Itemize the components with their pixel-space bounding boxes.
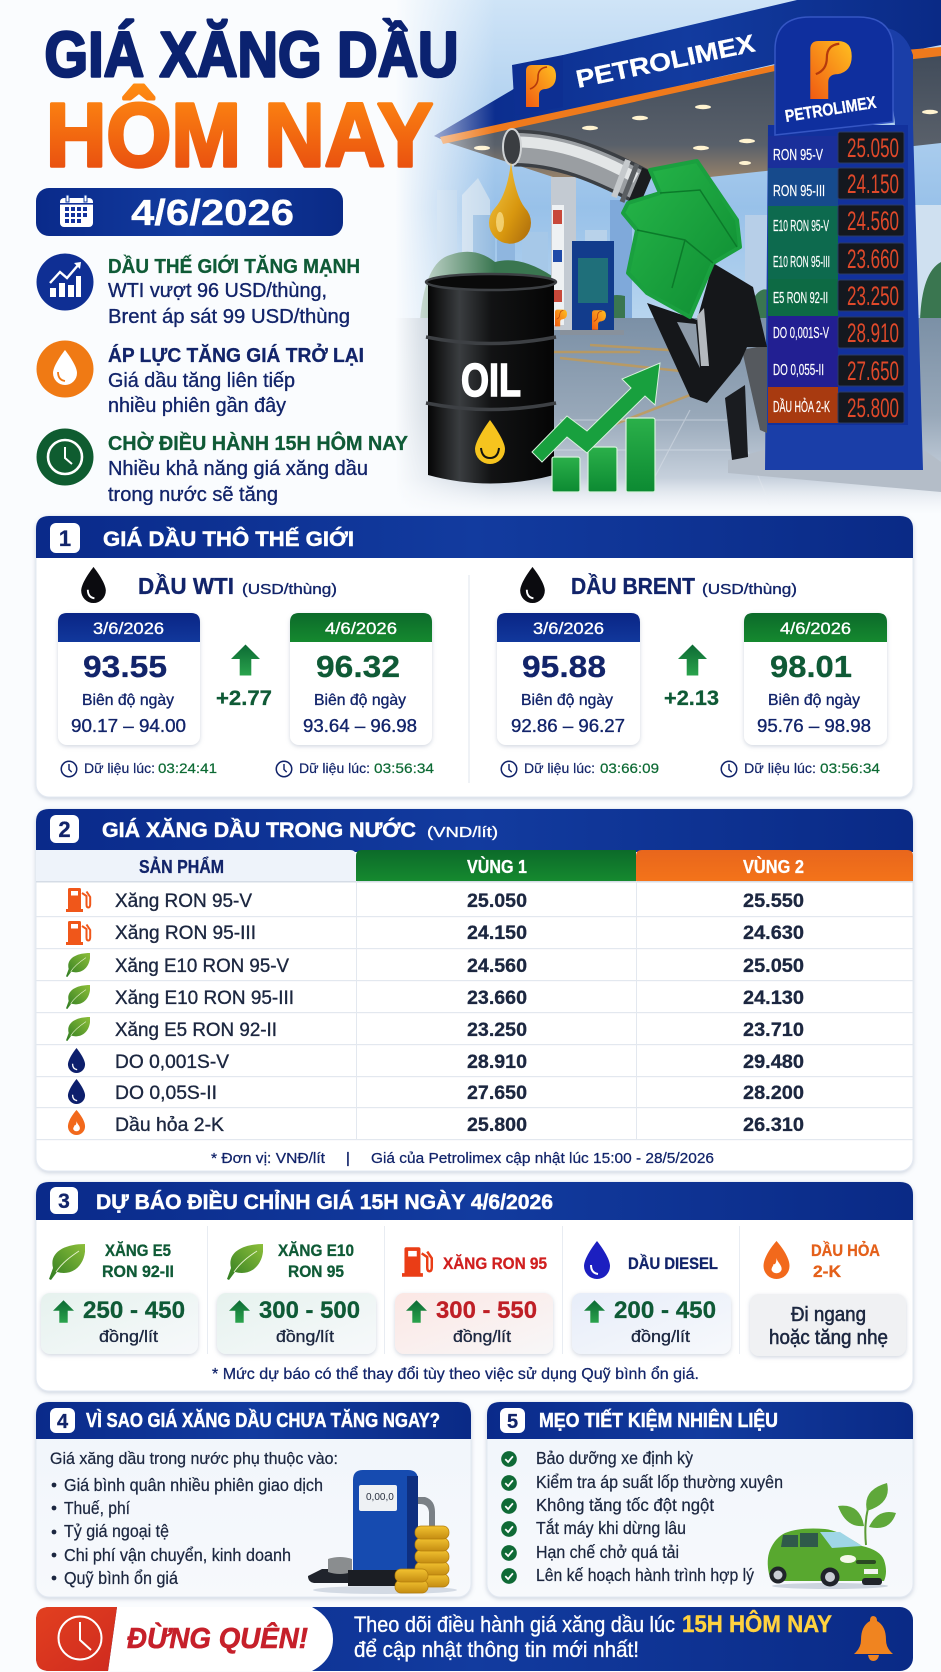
tips list: Tắt máy khi dừng lâu	[536, 1517, 686, 1538]
forecast: kerosene	[750, 1241, 906, 1356]
fuel rows: 23.250	[847, 281, 899, 311]
data timestamps: Dữ liệu lúc:	[299, 760, 370, 776]
barrel drop icon	[475, 420, 505, 464]
icon: orange drop	[36, 340, 94, 398]
rising green chart	[532, 363, 660, 492]
highlight: upward pressure: ÁP LỰC TĂNG GIÁ TRỞ LẠI	[108, 343, 364, 367]
fuel rows: DO 0,001S-V	[773, 325, 829, 342]
region 1 values: 25.050	[467, 891, 527, 912]
highlight: world oil up: Brent áp sát 99 USD/thùng	[108, 306, 350, 328]
region 1 values: 28.910	[467, 1052, 527, 1073]
forecast: E10: XĂNG E10	[278, 1241, 354, 1260]
forecast: diesel: DẦU DIESEL	[628, 1254, 718, 1273]
table head: VÙNG 1	[467, 856, 527, 877]
highlight: wait for 15h: Nhiều khả năng giá xăng dầu	[108, 458, 368, 480]
data timestamps: 03:56:34	[820, 760, 880, 776]
title line 2: HÔM NAY	[46, 84, 433, 186]
panel 4 header: VÌ SAO GIÁ XĂNG DẦU CHƯA TĂNG NGAY?	[86, 1409, 440, 1432]
row names: Xăng E10 RON 95-V	[115, 956, 289, 977]
title line 1: GIÁ XĂNG DẦU	[44, 18, 458, 90]
fuel rows: 24.150	[847, 169, 899, 199]
fuel rows: E5 RON 92-II	[773, 290, 828, 307]
data timestamps: 03:56:34	[374, 760, 434, 776]
Brent 3/6 card	[497, 613, 640, 745]
region 2 values: 23.710	[743, 1020, 804, 1041]
forecast: E10: đồng/lít	[276, 1327, 334, 1346]
highlight: wait for 15h: trong nước sẽ tăng	[108, 484, 278, 506]
reminder text: 15H HÔM NAY	[682, 1610, 832, 1638]
WTI 3/6 card: 3/6/2026	[93, 619, 164, 638]
banner white label	[108, 1607, 333, 1671]
region 2 values	[743, 891, 804, 1136]
WTI 3/6 card: Biên độ ngày	[82, 692, 174, 709]
region 2 values: 28.200	[743, 1083, 804, 1104]
forecast: RON 95: XĂNG RON 95	[443, 1254, 547, 1273]
forecast: E5: 250 - 450	[83, 1297, 185, 1324]
city skyline	[437, 178, 941, 322]
highlight: world oil up	[36, 254, 360, 328]
forecast: E5	[41, 1241, 198, 1354]
row names: DO 0,05S-II	[115, 1083, 217, 1104]
Brent heading	[520, 567, 797, 603]
row names: DO 0,001S-V	[115, 1052, 229, 1073]
forecast: diesel: đồng/lít	[631, 1327, 690, 1346]
factor list	[52, 1475, 323, 1588]
panel 5 header: 5	[507, 1411, 518, 1433]
canopy logo block with brand name	[512, 29, 758, 115]
factor list: Giá bình quân nhiều phiên giao dịch	[64, 1475, 323, 1495]
reminder text	[354, 1610, 832, 1662]
canopy brand text: PETROLIMEX	[574, 29, 758, 94]
forecast: E10: RON 95	[288, 1262, 344, 1281]
icon: calendar	[60, 195, 93, 227]
oil barrel	[426, 274, 556, 484]
forecast: E5: RON 92-II	[102, 1262, 174, 1281]
WTI 3/6 card: 90.17 – 94.00	[71, 716, 186, 736]
data timestamps: 03:66:09	[600, 760, 659, 776]
panel 5 header: MẸO TIẾT KIỆM NHIÊN LIỆU	[539, 1408, 778, 1432]
icon: growth chart	[36, 254, 94, 310]
fuel rows: E10 RON 95-III	[773, 254, 830, 271]
WTI 4/6 card: 93.64 – 96.98	[303, 716, 417, 736]
Brent 4/6 card: Biên độ ngày	[768, 692, 860, 709]
fuel rows: DO 0,055-II	[773, 362, 824, 379]
highlight: wait for 15h	[36, 428, 409, 506]
fuel rows: 25.050	[847, 133, 899, 163]
factor list: Tỷ giá ngoại tệ	[64, 1521, 169, 1541]
Brent change	[664, 645, 719, 710]
highlight: world oil up: WTI vượt 96 USD/thùng,	[108, 280, 327, 302]
WTI heading	[81, 567, 337, 603]
tips list	[501, 1448, 783, 1585]
tips list: Bảo dưỡng xe định kỳ	[536, 1448, 693, 1468]
table head: SẢN PHẨM	[139, 856, 224, 877]
forecast: RON 95: 300 - 550	[436, 1297, 537, 1324]
barrel label: OIL	[461, 354, 521, 406]
fuel rows: E10 RON 95-V	[773, 218, 829, 235]
data timestamps: Dữ liệu lúc:	[84, 760, 155, 776]
Brent heading: DẦU BRENT	[571, 572, 695, 599]
forecast: E10: 300 - 500	[259, 1297, 360, 1324]
panel 1 header: 1	[59, 526, 71, 551]
Brent 3/6 card: Biên độ ngày	[521, 692, 613, 709]
icon: bell	[854, 1616, 893, 1661]
Brent 3/6 card: 95.88	[522, 649, 606, 684]
region 1 values: 25.800	[467, 1115, 527, 1136]
canopy underside	[443, 48, 941, 177]
fuel rows: DẦU HỎA 2-K	[773, 397, 830, 416]
reminder label: ĐỪNG QUÊN!	[127, 1621, 308, 1655]
fuel rows: 28.910	[847, 318, 899, 348]
region 2 values: 29.480	[743, 1052, 804, 1073]
fuel nozzle	[503, 129, 767, 460]
fuel rows: 23.660	[847, 244, 899, 274]
Brent 4/6 card: 98.01	[770, 649, 852, 684]
region 2 values: 26.310	[743, 1115, 804, 1136]
WTI 4/6 card: 4/6/2026	[325, 619, 397, 638]
forecast: RON 95	[395, 1247, 553, 1354]
fuel rows	[768, 132, 904, 423]
region 2 values: 24.130	[743, 988, 804, 1009]
hero scene: fuel station background	[395, 0, 941, 513]
banner red block	[36, 1607, 117, 1671]
region 2 values: 25.550	[743, 891, 804, 912]
data timestamps	[61, 760, 880, 777]
highlight: upward pressure: Giá dầu tăng liên tiếp	[108, 370, 295, 392]
Brent heading: (USD/thùng)	[702, 581, 797, 598]
region 2 values: 24.630	[743, 923, 804, 944]
forecast: diesel: 200 - 450	[614, 1297, 716, 1324]
Brent 4/6 card: 4/6/2026	[780, 619, 851, 638]
table head	[36, 850, 913, 881]
WTI change: +2.77	[216, 687, 272, 710]
Brent 4/6 card	[744, 613, 887, 745]
oil drop	[489, 162, 531, 244]
panel 3: forecast	[36, 1182, 913, 1391]
tips list: Không tăng tốc đột ngột	[536, 1495, 714, 1515]
row icons	[66, 888, 90, 1135]
table footnote: |	[346, 1150, 350, 1167]
Brent 3/6 card: 92.86 – 96.27	[511, 716, 625, 736]
panel 4 header	[36, 1402, 471, 1439]
row names: Xăng E5 RON 92-II	[115, 1020, 277, 1041]
row names: Xăng E10 RON 95-III	[115, 988, 294, 1009]
WTI heading: (USD/thùng)	[242, 581, 337, 598]
panel 2 header: (VND/lít)	[427, 824, 498, 841]
region 1 values: 24.150	[467, 923, 527, 944]
fuel rows: 25.800	[847, 393, 899, 423]
Brent 3/6 card: 3/6/2026	[533, 619, 604, 638]
WTI change	[216, 645, 272, 710]
region 2 values: 25.050	[743, 956, 804, 977]
panel 3 header: DỰ BÁO ĐIỀU CHỈNH GIÁ 15H NGÀY 4/6/2026	[96, 1191, 553, 1214]
fuel rows: RON 95-III	[773, 183, 825, 200]
date pill	[36, 188, 343, 236]
WTI 4/6 card: 96.32	[316, 649, 400, 684]
illustration: pump and coins: 0,00,0	[366, 1492, 394, 1503]
forecast: kerosene: DẦU HỎA	[811, 1241, 880, 1260]
forecourt floor	[395, 318, 941, 513]
tips list: Lên kế hoạch hành trình hợp lý	[536, 1565, 754, 1585]
highlight: wait for 15h: CHỜ ĐIỀU HÀNH 15H HÔM NAY	[108, 431, 409, 455]
orange stripe	[440, 47, 941, 144]
icon: clock	[58, 1616, 102, 1660]
highlight: upward pressure: nhiều phiên gần đây	[108, 395, 286, 417]
intro text: Giá xăng dầu trong nước phụ thuộc vào:	[50, 1449, 338, 1468]
icon: clock	[36, 428, 94, 486]
forecast note: * Mức dự báo có thể thay đổi tùy theo việc sử dụng Quỹ bình ổn giá.	[212, 1366, 699, 1383]
data timestamps: Dữ liệu lúc:	[524, 760, 595, 776]
illustration: green car with plant	[768, 1483, 896, 1589]
forecast: E10	[217, 1241, 376, 1354]
WTI 4/6 card	[290, 613, 432, 745]
forecast: diesel	[572, 1241, 731, 1354]
factor list: Thuế, phí	[64, 1498, 130, 1518]
illustration: pump and coins	[308, 1470, 457, 1594]
tips list: Kiểm tra áp suất lốp thường xuyên	[536, 1472, 783, 1492]
forecast: kerosene: hoặc tăng nhẹ	[769, 1327, 888, 1349]
canopy lights	[474, 105, 938, 165]
row names: Dầu hỏa 2-K	[115, 1115, 224, 1136]
region 1 values: 23.660	[467, 988, 527, 1009]
panel 3 header: 3	[58, 1190, 70, 1213]
date text: 4/6/2026	[131, 192, 294, 233]
panel 2 header: 2	[58, 817, 71, 842]
forecast: RON 95: đồng/lít	[453, 1327, 511, 1346]
reminder text: để cập nhật thông tin mới nhất!	[354, 1637, 639, 1662]
row names: Xăng RON 95-III	[115, 923, 256, 944]
row names	[115, 891, 294, 1136]
panel 2: domestic prices	[36, 809, 913, 1171]
bottom fade of hero	[395, 478, 941, 515]
panel 4 header: 4	[57, 1411, 69, 1433]
region 1 values: 27.650	[467, 1083, 527, 1104]
tree line	[420, 252, 941, 320]
fuel rows: 27.650	[847, 356, 899, 386]
WTI 3/6 card: 93.55	[83, 649, 167, 684]
fuel rows: RON 95-V	[773, 147, 823, 164]
tips list: Hạn chế chở quá tải	[536, 1542, 679, 1562]
factor list: Chi phí vận chuyển, kinh doanh	[64, 1545, 291, 1565]
table footnote: * Đơn vị: VNĐ/lít	[211, 1150, 326, 1167]
panel 4: why prices lag	[36, 1402, 471, 1597]
data timestamps: Dữ liệu lúc:	[744, 760, 816, 776]
WTI 3/6 card	[58, 613, 200, 745]
highlight: world oil up: DẦU THẾ GIỚI TĂNG MẠNH	[108, 254, 360, 278]
region 1 values: 24.560	[467, 956, 527, 977]
forecast: E5: đồng/lít	[99, 1327, 158, 1346]
region 1 values	[467, 891, 527, 1136]
panel 1 header: GIÁ DẦU THÔ THẾ GIỚI	[103, 527, 354, 551]
factor list: Quỹ bình ổn giá	[64, 1568, 178, 1588]
WTI 4/6 card: Biên độ ngày	[314, 692, 406, 709]
background pillar and pump	[551, 176, 624, 335]
left fade of hero	[395, 0, 495, 515]
panel 3 header	[36, 1182, 913, 1220]
reminder text: Theo dõi điều hành giá xăng dầu lúc	[354, 1612, 675, 1637]
fuel rows: 24.560	[847, 206, 899, 236]
forecast: E5: XĂNG E5	[105, 1241, 171, 1260]
data timestamps: 03:24:41	[158, 760, 217, 776]
price totem	[728, 17, 941, 492]
forecast: kerosene: 2-K	[813, 1262, 842, 1281]
region 1 values: 23.250	[467, 1020, 527, 1041]
WTI heading: DẦU WTI	[138, 572, 234, 599]
panel 5 header	[487, 1402, 913, 1439]
totem brand text: PETROLIMEX	[784, 93, 878, 126]
table footnote: Giá của Petrolimex cập nhật lúc 15:00 - 28/5/2026	[371, 1150, 714, 1167]
panel 1: world crude prices	[36, 516, 913, 797]
panel 5: saving tips	[487, 1402, 913, 1597]
row names: Xăng RON 95-V	[115, 891, 252, 912]
canopy fascia	[434, 0, 941, 140]
reminder banner	[36, 1607, 913, 1671]
highlight: upward pressure	[36, 340, 364, 417]
panel 2 header: GIÁ XĂNG DẦU TRONG NƯỚC	[102, 818, 416, 842]
forecast: kerosene: Đi ngang	[791, 1304, 866, 1326]
table footnote	[211, 1150, 714, 1167]
table head: VÙNG 2	[743, 856, 804, 877]
Brent change: +2.13	[664, 687, 719, 710]
panel 1 header	[36, 516, 913, 558]
Brent 4/6 card: 95.76 – 98.98	[757, 716, 871, 736]
panel 2 header	[36, 809, 913, 852]
